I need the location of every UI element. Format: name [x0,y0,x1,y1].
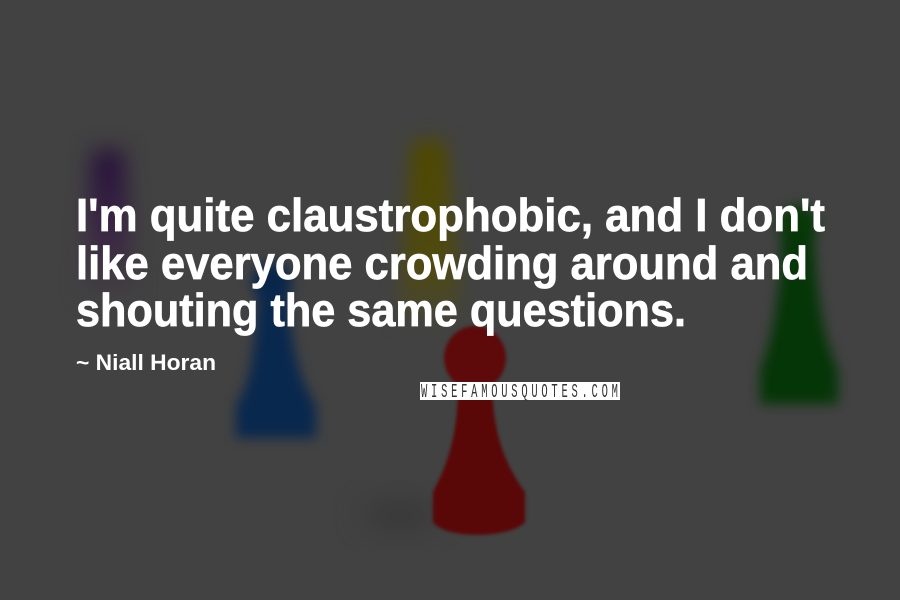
watermark: WISEFAMOUSQUOTES.COM [421,381,618,403]
shadow of red pawn [362,503,438,527]
quote line 1: I'm quite claustrophobic, and I don't [76,189,825,241]
pawn: red, in focus [433,326,525,535]
pawn: yellow, blurred [398,140,462,320]
pawn: green, blurred [760,205,838,404]
quote line 3: shouting the same questions. [76,284,686,336]
quote line 2: like everyone crowding around and [76,237,808,289]
pawn: blue, blurred [236,262,316,438]
author attribution: ~ Niall Horan [76,350,216,375]
quote text [76,189,825,336]
pawn: purple, blurred [84,150,134,295]
